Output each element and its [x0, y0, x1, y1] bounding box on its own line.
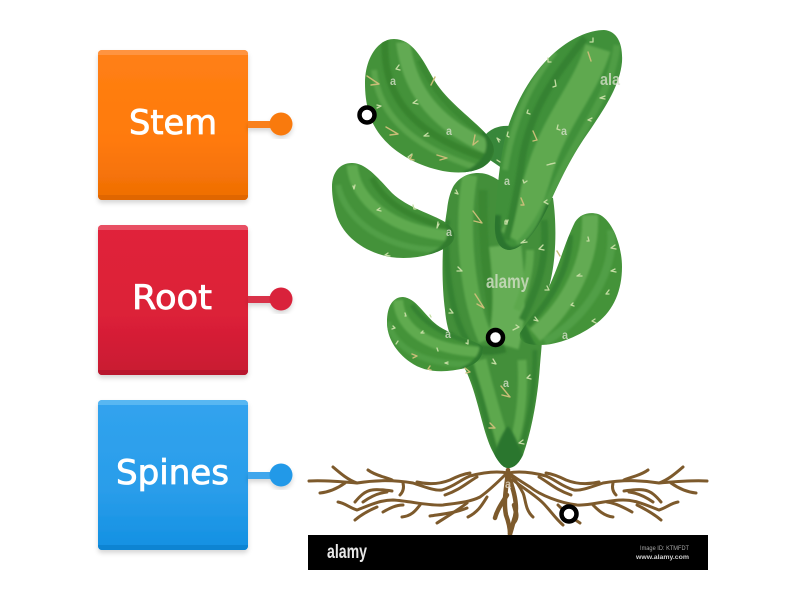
spines — [353, 38, 616, 444]
tan spines — [367, 52, 591, 428]
image id: Image ID: KTMFDT — [640, 546, 689, 552]
watermark: alamy: a — [390, 74, 396, 88]
arm: upper left — [365, 39, 494, 172]
watermark: alamy: a — [445, 327, 451, 341]
stem tip shading — [494, 426, 524, 468]
connector: Spines pin — [248, 464, 292, 486]
watermark: alamy: a — [446, 225, 452, 239]
watermark bar — [308, 535, 708, 570]
arm: lower far left — [332, 163, 454, 258]
button: Root — [98, 225, 248, 375]
illustration: cactus with roots — [309, 25, 707, 534]
watermark: alamy: a — [561, 124, 567, 138]
watermark: alamy: a — [562, 328, 568, 342]
connector: Root pin — [248, 288, 292, 310]
watermark: alamy: a — [503, 376, 509, 390]
panel: Stem label — [98, 50, 292, 200]
connector: Stem pin — [248, 112, 292, 136]
panel: Spines label — [98, 400, 292, 550]
button: Spines — [98, 400, 248, 550]
watermark: alamy: a — [446, 124, 452, 138]
watermark: alamy: ala — [600, 70, 620, 89]
heading: Root: Root — [132, 278, 212, 318]
watermark: alamy: a — [504, 174, 510, 188]
arm: lower left — [387, 297, 482, 372]
arm: lower right — [520, 213, 622, 345]
watermark: alamy: alamy — [486, 272, 529, 293]
marker: root target — [562, 506, 576, 522]
panel: Root label — [98, 225, 292, 375]
roots — [309, 467, 707, 534]
arm: upper right — [495, 30, 622, 250]
watermark: alamy: a — [505, 477, 511, 491]
arm: upper knob — [485, 126, 512, 175]
watermark: alamy — [390, 70, 620, 491]
website: www.alamy.com — [635, 554, 689, 561]
button: Stem — [98, 50, 248, 200]
logo: alamy: alamy — [327, 542, 367, 563]
heading: Spines: Spines — [116, 453, 229, 493]
arm: main stem — [442, 173, 556, 468]
heading: Stem: Stem — [129, 103, 217, 143]
marker: stem target — [360, 108, 374, 122]
marker: middle target — [488, 330, 503, 345]
